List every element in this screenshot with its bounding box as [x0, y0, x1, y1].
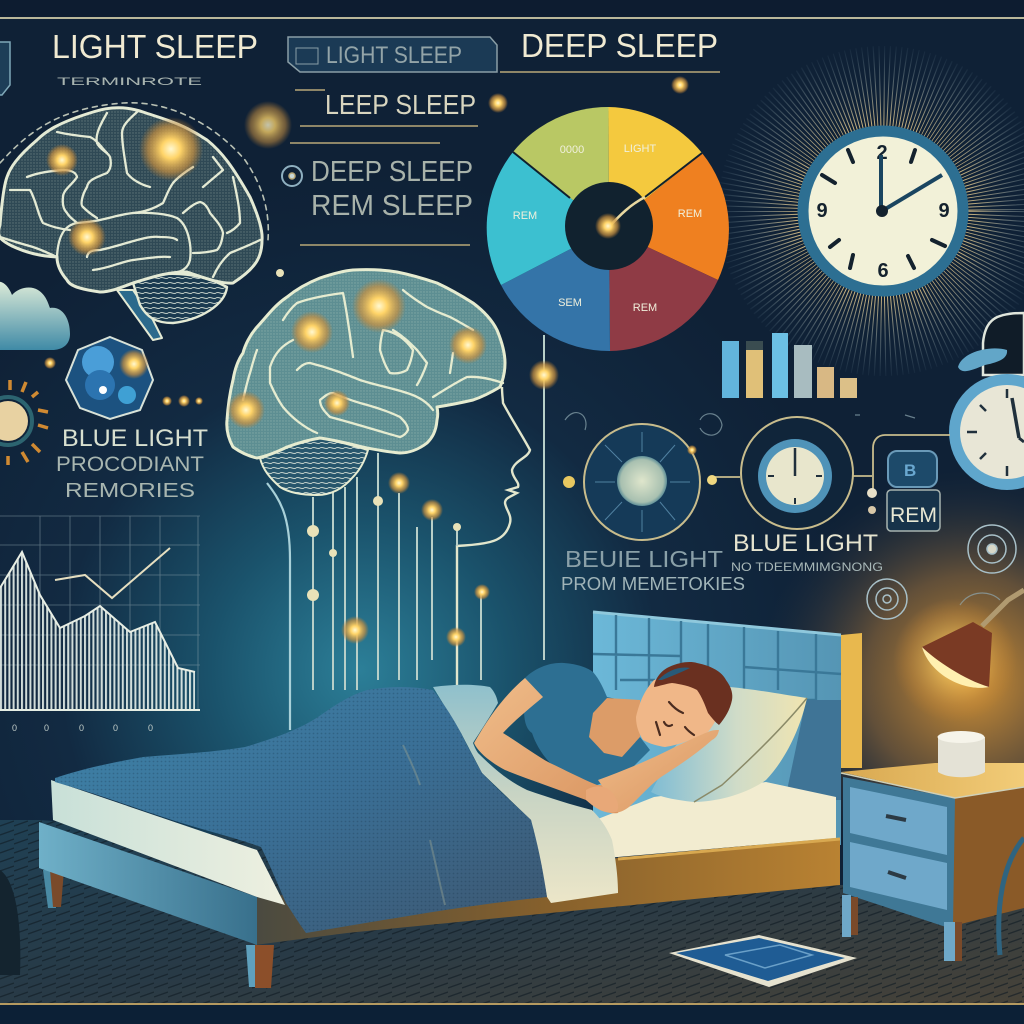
headboard — [593, 612, 862, 845]
blanket — [55, 687, 547, 933]
wood top edge — [618, 839, 840, 859]
cloud icon — [0, 282, 70, 350]
pillow seam — [694, 698, 807, 802]
line chart — [0, 516, 200, 710]
hair highlight — [658, 668, 690, 680]
floor — [0, 820, 1024, 1004]
bar chart — [722, 333, 857, 398]
small glow dots near gem — [44, 357, 203, 407]
pie labels: LIGHT — [624, 143, 656, 155]
label box: light sleep — [288, 37, 497, 72]
pie chart — [487, 107, 729, 351]
small clock icon — [741, 417, 853, 529]
brain 2 glows — [227, 279, 487, 429]
brain 2 — [227, 270, 505, 495]
chart axis labels: 0 — [148, 723, 153, 733]
neural nodes — [276, 76, 689, 647]
text: leep sleep: LEEP SLEEP — [325, 89, 476, 120]
head — [636, 678, 720, 747]
neck and chest — [589, 698, 640, 757]
text: prom memetokies: PROM MEMETOKIES — [561, 574, 745, 594]
chart axis labels: 0 — [44, 723, 49, 733]
top frame line — [0, 17, 1024, 19]
pie labels: 0000 — [560, 144, 584, 156]
moon circle icon — [584, 424, 700, 540]
sunburst behind clock — [758, 86, 1008, 336]
shirt — [524, 663, 650, 785]
rem icon boxes: B — [904, 461, 916, 480]
pie labels: SEM — [558, 297, 582, 309]
bed legs — [43, 870, 274, 988]
face features — [656, 702, 694, 735]
small text: NO TDEEMMIMGNONG — [731, 560, 883, 574]
pie labels: REM — [633, 302, 657, 314]
text: remories: REMORIES — [65, 480, 195, 502]
heading: deep sleep: DEEP SLEEP — [521, 27, 718, 64]
rem icon boxes: REM — [890, 504, 937, 527]
text: bluie light: BEUIE LIGHT — [565, 546, 723, 572]
connectors and nodes — [563, 435, 950, 514]
text: procodiant: PROCODIANT — [56, 453, 204, 476]
pie labels: REM — [678, 208, 702, 220]
bed rail — [39, 822, 257, 945]
sleeper — [474, 662, 732, 813]
text: deep sleep: DEEP SLEEP — [311, 156, 473, 188]
wall clock: 2 — [876, 142, 888, 164]
pie labels: REM — [513, 210, 537, 222]
rem icon boxes — [887, 451, 940, 531]
blanket cream — [433, 685, 618, 903]
book on floor — [669, 935, 857, 987]
brain 1 glows — [46, 101, 292, 256]
alarm clock — [949, 313, 1024, 490]
neck outline — [267, 483, 290, 730]
small caption under light sleep: TERMINROTE — [57, 76, 202, 88]
neural lines — [313, 335, 544, 690]
far arm — [474, 678, 620, 813]
hair — [654, 662, 732, 725]
wall clock: 9 — [938, 200, 950, 222]
chart axis labels — [12, 723, 153, 733]
label box: light sleep: LIGHT SLEEP — [326, 42, 462, 69]
bag left — [0, 870, 20, 975]
brain 1 — [0, 103, 268, 340]
pillow — [651, 687, 807, 802]
pie labels — [513, 143, 702, 314]
smart speaker — [938, 731, 985, 777]
chart axis labels: 0 — [12, 723, 17, 733]
text: rem sleep: REM SLEEP — [311, 190, 473, 222]
nightstand — [841, 763, 1024, 961]
wall clock — [798, 126, 968, 296]
text: blue light: BLUE LIGHT — [62, 425, 208, 452]
near arm — [598, 730, 719, 812]
heading: light sleep: LIGHT SLEEP — [52, 28, 258, 65]
chart axis labels: 0 — [79, 723, 84, 733]
doodles near circles — [565, 413, 1000, 605]
swirl icons — [867, 525, 1016, 619]
left edge badge — [0, 42, 10, 95]
chart axis labels: 0 — [113, 723, 118, 733]
head profile outline — [457, 387, 530, 690]
wall clock: 9 — [816, 200, 828, 222]
gem icon — [66, 337, 153, 419]
wall clock: 6 — [877, 260, 889, 282]
text: blue light right: BLUE LIGHT — [733, 530, 878, 557]
bed wood frame — [255, 838, 840, 945]
lamp — [893, 590, 1024, 722]
sun icon — [0, 380, 48, 465]
mattress left — [51, 780, 285, 905]
chair edge — [999, 838, 1024, 955]
mattress right — [580, 782, 836, 860]
connector lines — [282, 72, 720, 245]
bottom band — [0, 1004, 1024, 1024]
hand — [586, 786, 618, 813]
